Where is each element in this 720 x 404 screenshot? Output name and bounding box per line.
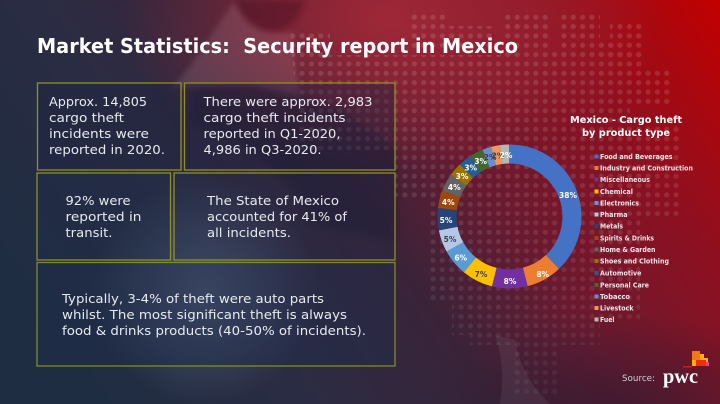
legend: Spirits & Drinks: [600, 234, 654, 242]
panel: quarterly incidents: 4,986 in Q3-2020.: [204, 143, 322, 157]
donut labels: 38%: [559, 191, 577, 200]
donut labels: 4%: [448, 183, 461, 192]
legend: Shoes and Clothing: [600, 258, 669, 266]
panel: auto parts and food: Typically, 3-4% of theft were auto parts: [61, 292, 324, 306]
icon: PwC logo: [663, 351, 709, 388]
legend: Automotive: [600, 270, 642, 278]
panel: quarterly incidents: There were approx. 2,983: [202, 95, 372, 109]
donut chart: [440, 151, 577, 286]
panel: 2020 incidents: cargo theft: [49, 111, 124, 125]
donut labels: 5%: [440, 216, 453, 225]
panel: 2020 incidents: Approx. 14,805: [49, 95, 147, 109]
panel: in transit: reported in: [66, 210, 142, 224]
legend: Pharma: [600, 211, 628, 219]
donut labels: 2%: [492, 152, 505, 160]
panel: State of Mexico: The State of Mexico: [206, 194, 339, 208]
donut labels: 3%: [456, 172, 469, 181]
legend: Chemical: [600, 188, 633, 196]
icon: PwC logo: pwc: [663, 366, 698, 388]
panel: in transit: [37, 173, 170, 260]
panel: auto parts and food: food & drinks products (40-50% of incidents).: [62, 324, 366, 338]
title: Market Statistics: Security report in Mexico: [37, 34, 518, 58]
panel: State of Mexico: [174, 173, 395, 260]
panel: State of Mexico: accounted for 41% of: [207, 210, 348, 224]
legend: Metals: [600, 222, 623, 230]
panel: 2020 incidents: reported in 2020.: [49, 143, 165, 157]
dotted world map: [290, 10, 680, 395]
panel: quarterly incidents: reported in Q1-2020,: [204, 127, 340, 141]
legend: Food and Beverages: [600, 153, 672, 161]
legend: Industry and Construction: [600, 164, 693, 172]
donut labels: 7%: [475, 270, 488, 279]
legend: [594, 153, 693, 324]
legend: Fuel: [600, 316, 614, 324]
chart title: [570, 115, 682, 139]
donut labels: 5%: [444, 235, 457, 244]
chart title: Mexico - Cargo theft: [570, 115, 682, 126]
panel: quarterly incidents: [184, 83, 395, 170]
donut labels: 3%: [464, 164, 478, 172]
legend: Tobacco: [600, 293, 630, 301]
panel: 2020 incidents: incidents were: [49, 127, 149, 141]
donut labels: [440, 151, 577, 286]
donut labels: 6%: [454, 254, 468, 262]
legend: Livestock: [600, 304, 634, 312]
legend: Personal Care: [600, 282, 649, 290]
donut labels: 4%: [442, 198, 455, 207]
donut labels: 3%: [474, 157, 488, 166]
legend: Miscellaneous: [600, 176, 650, 184]
donut labels: 8%: [536, 270, 550, 279]
legend: Home & Garden: [600, 246, 656, 254]
chart title: by product type: [582, 128, 670, 139]
panel: in transit: transit.: [66, 226, 112, 240]
panel: in transit: 92% were: [66, 194, 130, 208]
donut labels: 8%: [504, 277, 517, 286]
panel: State of Mexico: all incidents.: [207, 226, 291, 240]
donut labels: 2%: [500, 151, 513, 160]
donut labels: 2%: [484, 153, 497, 162]
panel: auto parts and food: [37, 262, 395, 366]
source label: Source:: [622, 374, 655, 384]
legend: Electronics: [600, 200, 639, 208]
panel: 2020 incidents: [38, 83, 181, 170]
panel: quarterly incidents: cargo theft incidents: [204, 111, 346, 125]
panel: auto parts and food: whilst. The most significant theft is always: [62, 308, 347, 322]
